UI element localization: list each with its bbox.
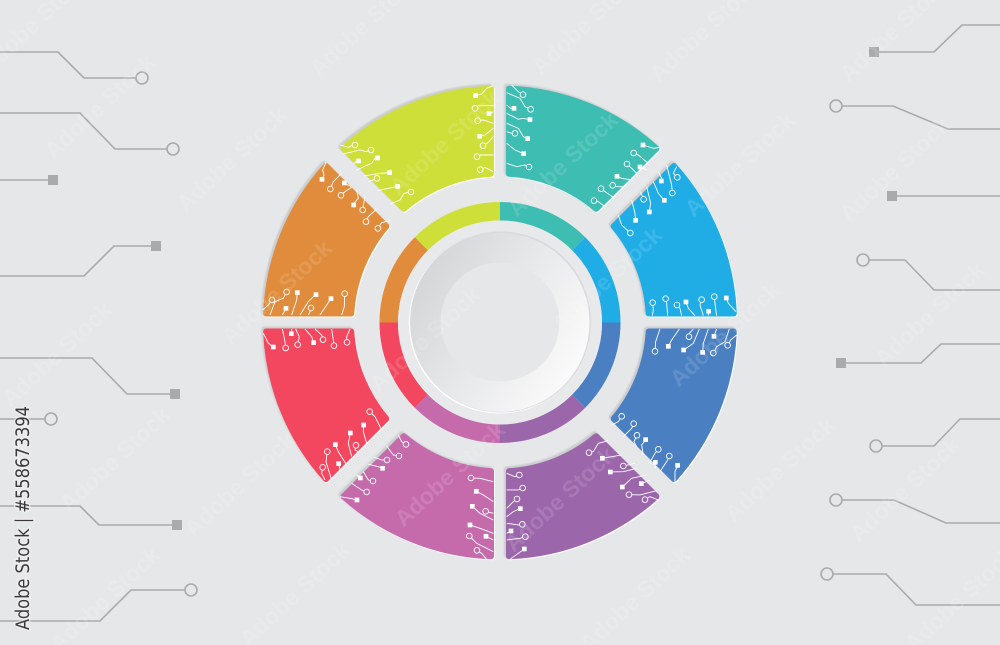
circuit traces: steel blue xyxy=(612,329,737,483)
panel: red segment xyxy=(263,329,386,480)
watermark: repeated stock text: Adobe Stock xyxy=(216,235,337,350)
watermark: repeated stock text: Adobe Stock xyxy=(869,257,990,372)
colored ring xyxy=(389,211,611,434)
circuit traces: orange xyxy=(263,162,390,315)
circuit traces: red xyxy=(263,329,382,480)
panel: magenta segment xyxy=(340,435,493,559)
watermark: repeated stock text: Adobe Stock xyxy=(54,402,175,517)
watermark: repeated stock text: Adobe Stock xyxy=(499,442,620,557)
panel: purple segment xyxy=(507,436,658,559)
panel: sky blue segment xyxy=(614,165,736,316)
panel: orange segment xyxy=(263,162,390,315)
watermark: repeated stock text: Adobe Stock xyxy=(179,427,300,542)
panel: yellow-green segment xyxy=(340,86,493,209)
center disc xyxy=(398,220,602,424)
watermark: repeated stock text: Adobe Stock xyxy=(844,432,965,547)
watermark: repeated stock text: Adobe Stock xyxy=(364,282,485,397)
right circuit lines xyxy=(821,25,1000,605)
panel: teal segment xyxy=(507,85,661,209)
panel: steel blue segment xyxy=(612,329,737,483)
watermark: repeated stock text: Adobe Stock xyxy=(389,417,510,532)
watermark: repeated stock text: Adobe Stock xyxy=(39,49,160,164)
watermark: repeated stock text: Adobe Stock xyxy=(719,412,840,527)
circuit traces: teal xyxy=(507,85,661,207)
circuit traces: yellow-green xyxy=(340,86,493,204)
circuit traces: sky blue xyxy=(618,165,736,316)
watermark: repeated stock text: Adobe Stock xyxy=(679,107,800,222)
circuit traces: magenta xyxy=(340,435,493,559)
watermark: repeated stock text: Adobe Stock xyxy=(384,85,505,200)
watermark: repeated stock text: Adobe Stock xyxy=(502,107,623,222)
left circuit lines xyxy=(0,52,197,621)
stock id vertical text: Adobe Stock | #558673394 xyxy=(13,406,34,630)
watermark: repeated stock text: Adobe Stock xyxy=(546,222,667,337)
watermark: repeated stock text: Adobe Stock xyxy=(664,277,785,392)
circuit traces: purple xyxy=(507,441,658,559)
watermark: repeated stock text: Adobe Stock xyxy=(834,112,955,227)
watermark: repeated stock text: Adobe Stock xyxy=(171,102,292,217)
